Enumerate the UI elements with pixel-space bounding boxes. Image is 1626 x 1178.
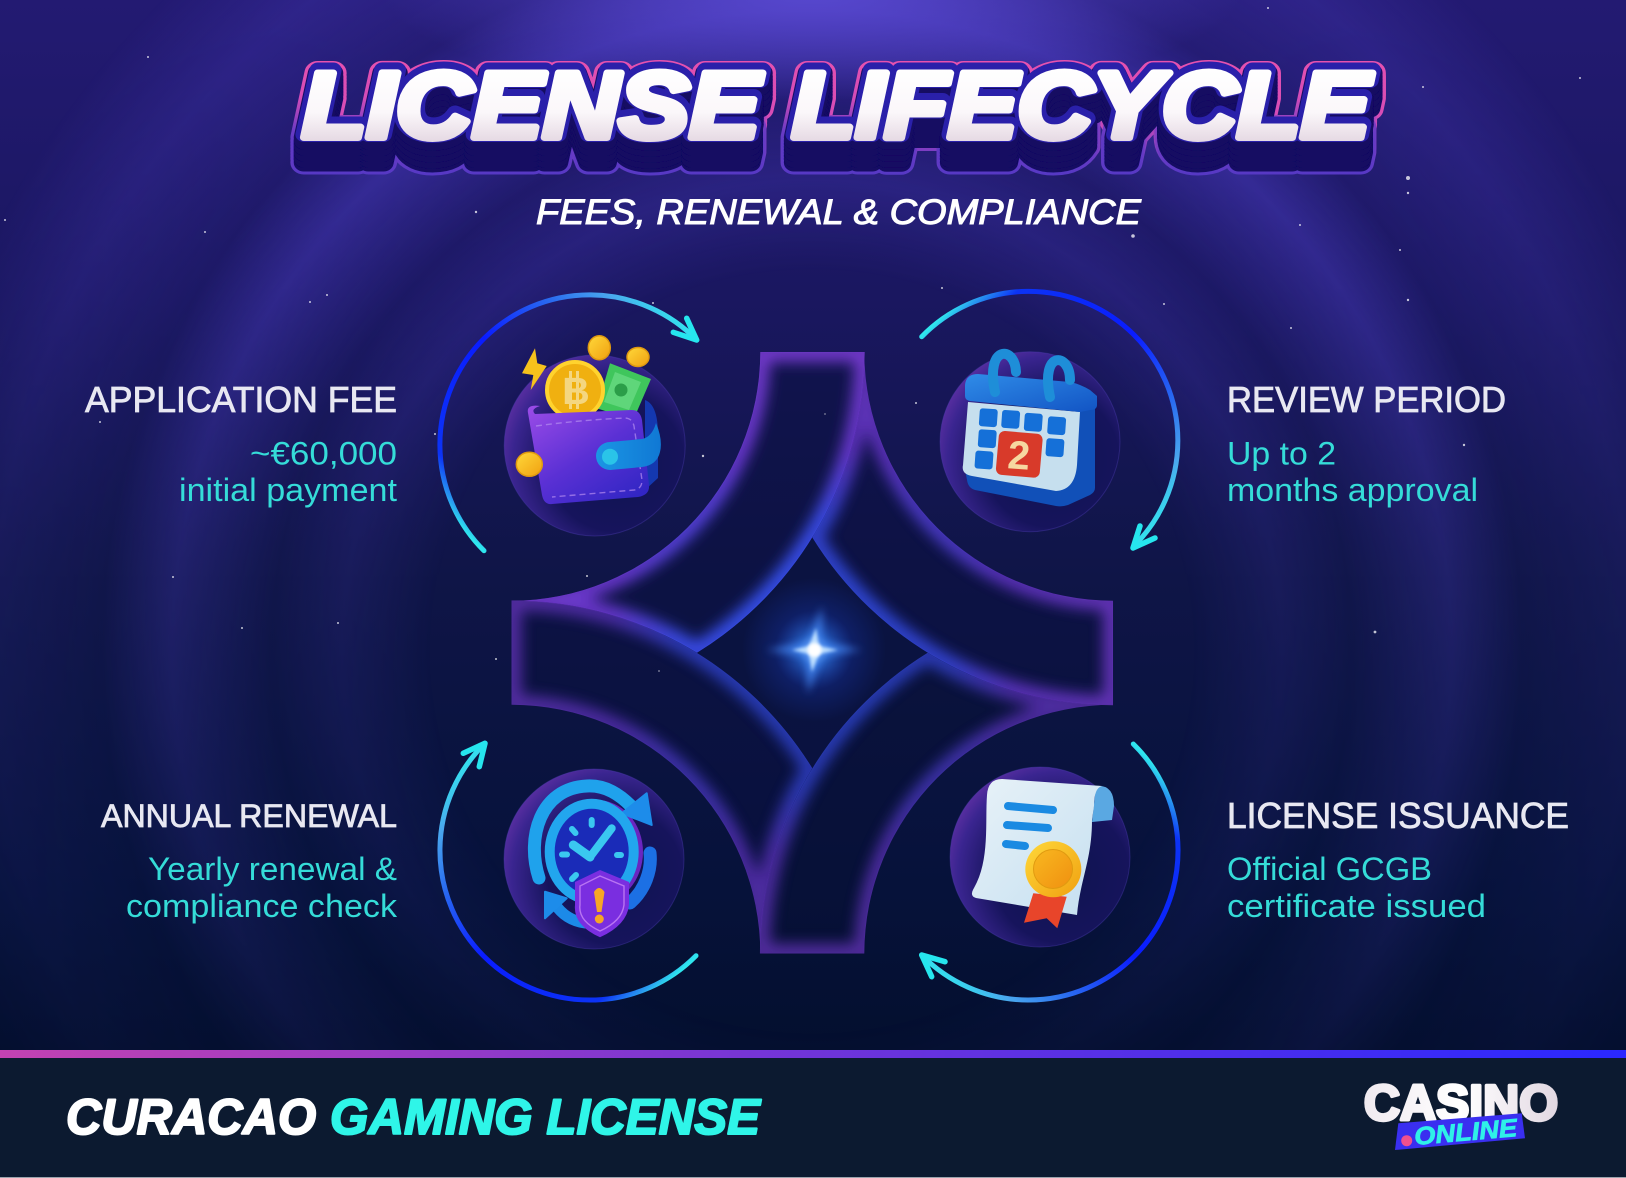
subtitle: FEES, RENEWAL & COMPLIANCE: [536, 193, 1142, 232]
text block: annual renewal: Yearly renewal &: [148, 851, 397, 887]
footer background: [0, 1058, 1626, 1177]
text block: annual renewal: compliance check: [126, 888, 398, 924]
icon: calendar: [940, 352, 1120, 532]
text block: application fee: APPLICATION FEE: [85, 379, 397, 420]
logo: casino.online: ONLINE: [1413, 1114, 1520, 1151]
arrow: review to issuance: [922, 291, 1178, 548]
bottom edge line: [0, 1177, 1626, 1178]
title: LICENSE LIFECYCLE: LIFECYCLE: [792, 52, 1374, 158]
footer heading: [66, 1089, 762, 1145]
arrow: application to review: [440, 295, 697, 551]
arrow: renewal to application: [440, 743, 696, 1000]
band: left: [512, 600, 812, 954]
footer heading: CURACAO: [66, 1089, 316, 1145]
band: right: [812, 352, 1113, 705]
band: bottom: [760, 653, 1114, 954]
icon: renewal clock with shield: [504, 769, 684, 949]
text block: application fee: [85, 379, 397, 508]
text block: license issuance: [1227, 795, 1569, 924]
text block: review period: months approval: [1227, 472, 1478, 508]
center diamond: [697, 538, 927, 768]
center star sparkle: [742, 578, 886, 722]
icon: wallet with coins: [504, 336, 685, 536]
text block: annual renewal: ANNUAL RENEWAL: [101, 798, 397, 834]
logo: casino.online: CASINO: [1364, 1075, 1558, 1131]
title: LICENSE LIFECYCLE: [302, 50, 1374, 158]
text block: application fee: initial payment: [179, 472, 397, 508]
text block: review period: Up to 2: [1227, 436, 1336, 472]
stars: [4, 7, 1581, 672]
text block: license issuance: certificate issued: [1227, 888, 1486, 924]
arrow: issuance to renewal: [922, 744, 1178, 1000]
central pinwheel shape: [511, 352, 1114, 954]
text block: license issuance: Official GCGB: [1227, 851, 1432, 887]
footer heading: GAMING LICENSE: [330, 1089, 762, 1145]
icon: calendar: 2: [1006, 433, 1031, 479]
icon: wallet with coins: B: [562, 371, 590, 413]
text block: application fee: ~€60,000: [250, 436, 397, 472]
band: top: [511, 352, 865, 653]
text block: review period: [1227, 379, 1506, 508]
text block: annual renewal: [101, 798, 398, 924]
text block: license issuance: LICENSE ISSUANCE: [1227, 795, 1569, 836]
title: LICENSE LIFECYCLE: LICENSE: [302, 52, 764, 158]
footer gradient bar: [0, 1050, 1626, 1058]
text block: review period: REVIEW PERIOD: [1227, 379, 1506, 420]
icon: certificate with seal: [950, 767, 1130, 947]
